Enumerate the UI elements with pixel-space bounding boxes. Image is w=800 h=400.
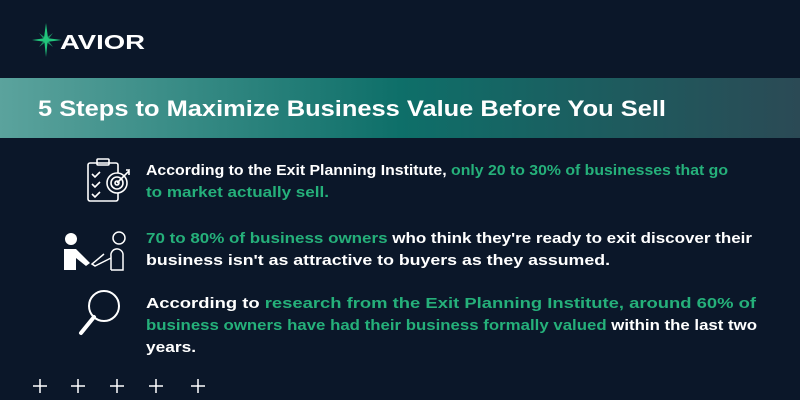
text block 2: business isn't as attractive to buyers as they assumed. (146, 252, 610, 269)
text block 3 (146, 295, 757, 356)
text block 3: According to research from the Exit Planning Institute, around 60% of (146, 295, 757, 312)
text block 3: years. (146, 339, 196, 356)
text block 2 (146, 230, 752, 269)
text block 1 (146, 162, 728, 201)
text block 1: to market actually sell. (146, 184, 329, 201)
decorative pluses (33, 379, 205, 393)
text block 2: 70 to 80% of business owners who think they're ready to exit discover their (146, 230, 752, 247)
logo text: AVIOR (60, 32, 146, 54)
icon: star (32, 23, 62, 57)
title: 5 Steps to Maximize Business Value Before You Sell (38, 96, 666, 121)
icon: magnifier (81, 291, 119, 333)
text block 1: According to the Exit Planning Institute, only 20 to 30% of businesses that go (146, 162, 728, 179)
icon: clipboard target (88, 159, 130, 201)
title banner (0, 78, 800, 138)
logo (32, 23, 146, 57)
icon: handshake people (64, 232, 125, 270)
text block 3: business owners have had their business formally valued within the last two (146, 317, 757, 334)
